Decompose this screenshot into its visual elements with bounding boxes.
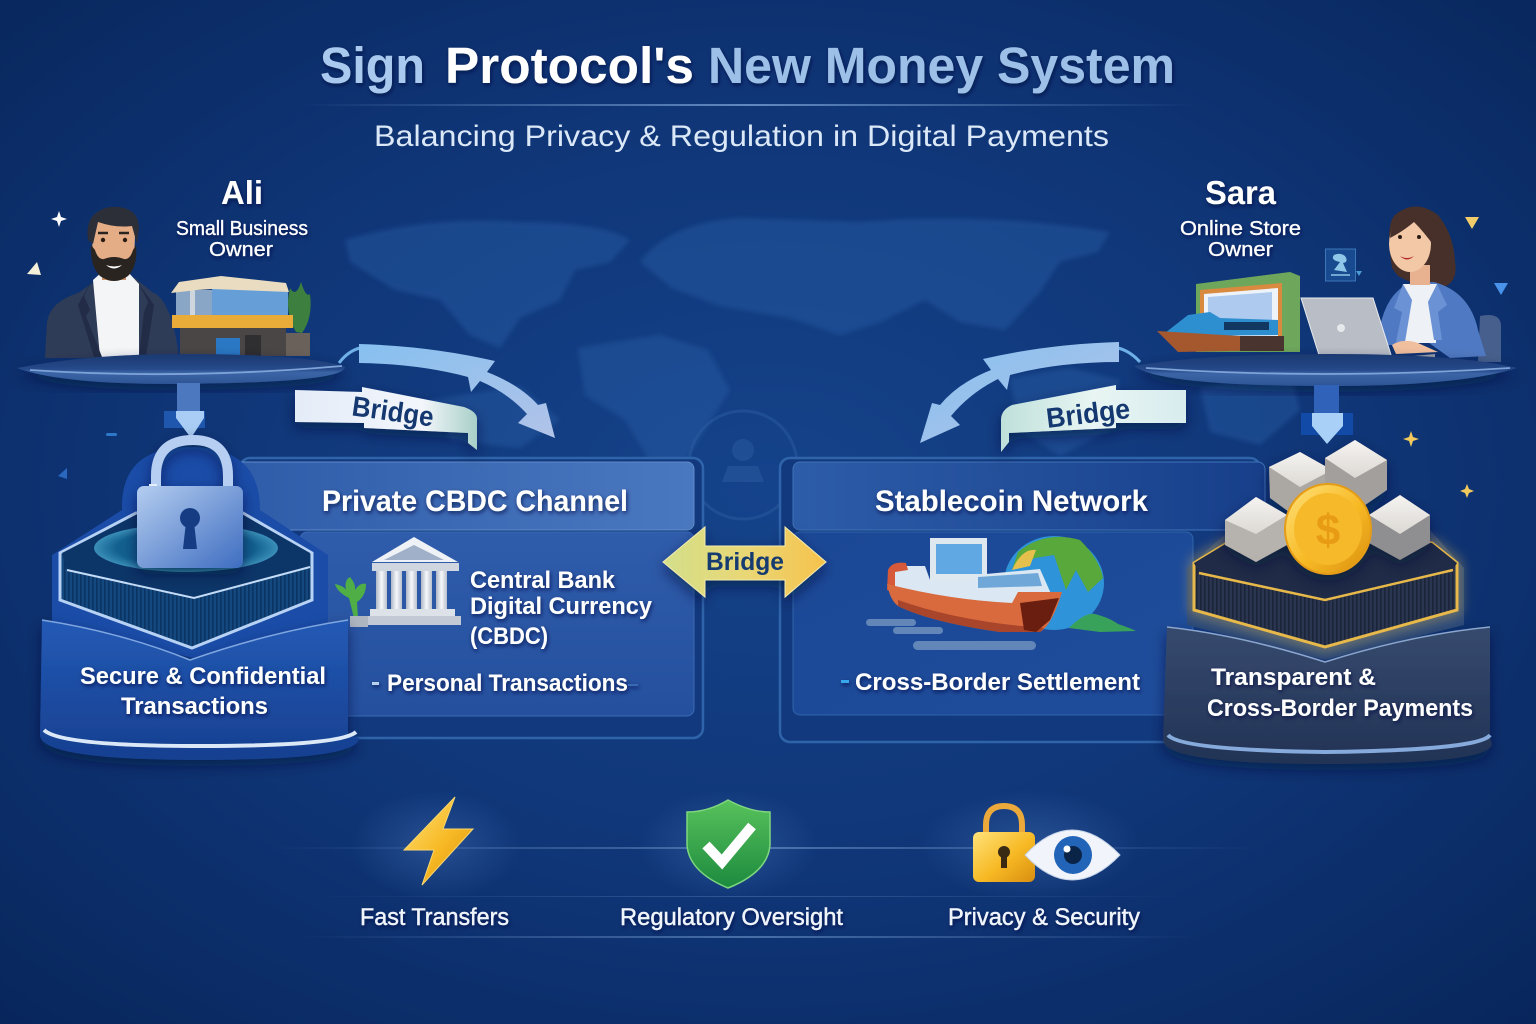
text: secure and confidential: Transactions xyxy=(121,693,268,720)
icon: Sara store and ship xyxy=(1157,272,1300,352)
pillar: transparent and cross-border xyxy=(1163,440,1492,764)
title xyxy=(320,37,1175,94)
icon: blocks and coin xyxy=(1225,440,1430,574)
center emblem xyxy=(689,411,797,519)
curved arrow: right bridge xyxy=(920,342,1140,443)
panel: Stablecoin Network xyxy=(780,458,1265,742)
icon: shield check xyxy=(687,800,770,888)
icon: Ali store xyxy=(171,276,311,356)
label: regulatory oversight: Regulatory Oversight xyxy=(620,904,843,931)
panel: Private CBDC Channel xyxy=(233,458,703,738)
text: CBDC definition xyxy=(470,567,653,650)
down arrow: Sara xyxy=(1301,385,1353,444)
panel header: CBDC: Private CBDC Channel xyxy=(322,485,628,518)
text: secure and confidential: Secure & Confidential xyxy=(80,663,326,690)
text: transparent and cross-border xyxy=(1207,664,1473,722)
icon: lightning xyxy=(404,797,473,885)
feature: privacy and security xyxy=(920,790,1140,931)
banner: left bridge xyxy=(295,387,477,450)
text: personal transactions: Personal Transactions xyxy=(387,670,628,697)
label: Ali: Ali xyxy=(221,174,263,211)
text: CBDC definition: (CBDC) xyxy=(470,623,548,650)
platform: Ali xyxy=(17,354,345,384)
icon: lock and eye xyxy=(973,806,1120,882)
curved arrow: left bridge xyxy=(339,344,555,438)
panel body: stablecoin xyxy=(793,532,1193,715)
icon: small tree tile xyxy=(1326,249,1362,281)
text: transparent and cross-border: Transparent & xyxy=(1211,664,1376,691)
label: Sara: Online Store xyxy=(1180,218,1301,240)
double arrow: center bridge: Bridge xyxy=(706,548,784,576)
feature: regulatory oversight xyxy=(620,790,843,931)
platform: Sara xyxy=(1134,354,1517,386)
icon: cargo ship and globe xyxy=(866,536,1136,650)
title: Sign xyxy=(320,37,425,94)
text: CBDC definition: Digital Currency xyxy=(470,593,653,620)
sparkle decorations xyxy=(27,211,1508,498)
label: Sara xyxy=(1180,174,1301,261)
text: CBDC definition: Central Bank xyxy=(470,567,616,594)
pillar: secure and confidential xyxy=(40,440,359,760)
banner: left bridge: Bridge xyxy=(350,390,436,433)
label: Ali xyxy=(176,174,308,261)
banner: right bridge: Bridge xyxy=(1044,393,1132,434)
figure: Ali xyxy=(45,207,179,358)
feature: fast transfers xyxy=(351,790,521,931)
banner: right bridge xyxy=(1001,385,1186,452)
text: secure and confidential xyxy=(80,663,326,720)
label: privacy and security: Privacy & Security xyxy=(948,904,1140,931)
title: Protocol's xyxy=(445,37,694,94)
base: transparent xyxy=(1163,627,1492,764)
panel header: stablecoin: Stablecoin Network xyxy=(875,485,1148,518)
title: New Money System xyxy=(708,37,1175,94)
text: cross-border settlement: Cross-Border Settlement xyxy=(855,669,1140,696)
subtitle: Balancing Privacy & Regulation in Digital Payments xyxy=(374,120,1109,153)
down arrow: Ali xyxy=(164,383,205,438)
icon: blocks and coin: $ xyxy=(1316,506,1340,555)
panel header: CBDC xyxy=(233,462,694,530)
label: Ali: Small Business xyxy=(176,218,308,240)
label: Sara: Owner xyxy=(1208,239,1273,261)
panel header: stablecoin xyxy=(793,462,1265,530)
world map backdrop xyxy=(345,218,1300,470)
double arrow: center bridge xyxy=(663,527,826,597)
base: secure xyxy=(40,620,359,760)
text: transparent and cross-border: Cross-Border Payments xyxy=(1207,695,1473,722)
figure: Sara xyxy=(1377,206,1501,362)
label: Sara: Sara xyxy=(1205,174,1277,211)
label: Ali: Owner xyxy=(209,239,273,261)
icon: padlock xyxy=(137,440,243,568)
icon: laptop xyxy=(1301,298,1435,360)
panel body: CBDC xyxy=(300,532,694,716)
decorative lines xyxy=(270,847,1260,938)
label: fast transfers: Fast Transfers xyxy=(360,904,509,931)
icon: central bank xyxy=(335,537,461,627)
